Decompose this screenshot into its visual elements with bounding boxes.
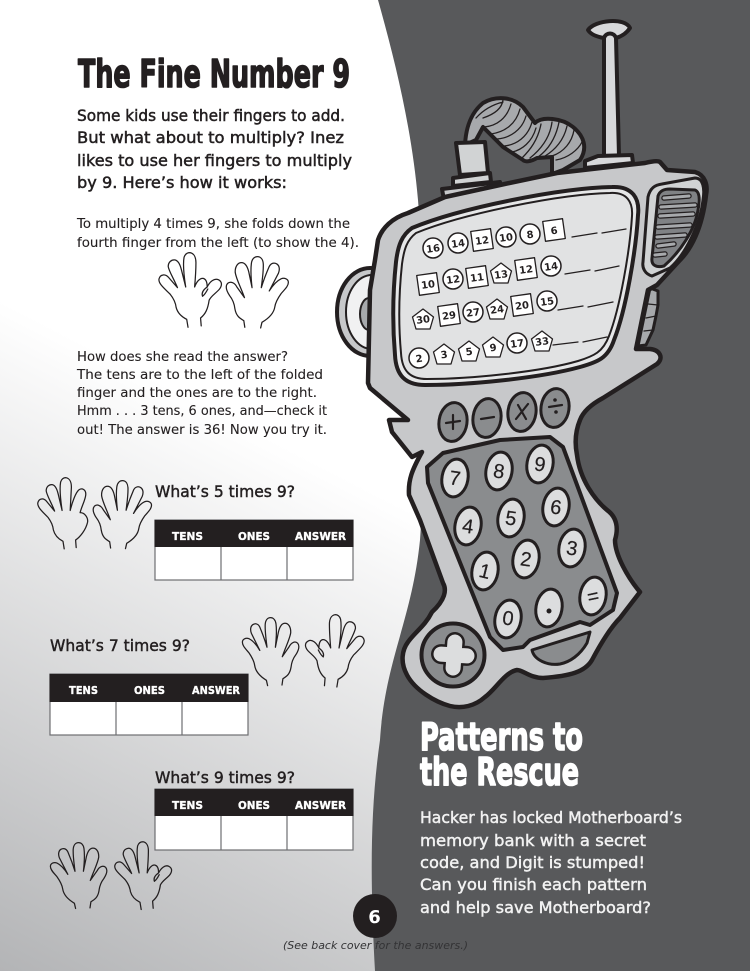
screen	[393, 187, 638, 385]
keypad: 0	[501, 607, 515, 631]
pattern row 4: 33	[535, 336, 550, 349]
answer table 2: ONES	[134, 684, 165, 697]
explanation text: The tens are to the left of the folded	[76, 368, 323, 383]
coiled cable	[465, 98, 584, 174]
page number badge: 6	[368, 907, 381, 928]
side buttons	[638, 288, 658, 346]
instruction text: To multiply 4 times 9, she folds down the	[76, 217, 350, 232]
pattern row 3: 15	[540, 296, 555, 309]
pattern row 3: 27	[466, 307, 481, 320]
keypad	[427, 437, 617, 650]
heading: Patterns to the Rescue: Patterns to	[420, 715, 583, 759]
answer table 3	[154, 789, 354, 850]
round directional pad	[422, 624, 484, 686]
answer table 3: ONES	[238, 799, 270, 812]
keypad: 7	[448, 467, 462, 491]
pattern row 2	[417, 256, 619, 295]
pattern row 1: 16	[426, 243, 441, 256]
pattern row 4: 5	[465, 347, 473, 358]
answer table 1: ONES	[238, 530, 270, 543]
plug	[442, 142, 500, 200]
keypad: 8	[492, 460, 506, 484]
keypad: 9	[533, 453, 547, 477]
pattern row 1: 14	[451, 238, 466, 251]
keypad: =	[585, 585, 601, 609]
keypad: 5	[504, 507, 518, 531]
question: 5 times 9: What’s 5 times 9?	[155, 482, 295, 501]
pattern row 2: 11	[470, 272, 485, 285]
answer table 2: TENS	[69, 684, 98, 697]
antenna	[585, 21, 633, 168]
explanation text: out! The answer is 36! Now you try it.	[77, 423, 327, 438]
pattern row 3: 24	[490, 304, 505, 317]
operation buttons	[436, 387, 572, 443]
page number badge	[353, 894, 397, 938]
answer table 3: ANSWER	[295, 799, 346, 812]
device body	[368, 161, 707, 707]
explanation text	[76, 350, 327, 438]
question: 7 times 9: What’s 7 times 9?	[50, 636, 190, 655]
pattern row 2: 12	[519, 264, 534, 277]
answer table 1	[154, 520, 354, 580]
intro paragraph: But what about to multiply? Inez	[77, 128, 344, 147]
pattern row 1: 12	[475, 235, 490, 248]
speaker vent	[643, 178, 704, 276]
pattern row 1: 8	[526, 230, 534, 241]
pattern row 3: 29	[442, 310, 457, 323]
heading: Patterns to the Rescue	[420, 715, 583, 794]
dark background panel	[372, 0, 750, 971]
icon: hands for 7 times 9	[242, 615, 364, 687]
question: 9 times 9: What’s 9 times 9?	[155, 768, 295, 787]
patterns paragraph: Hacker has locked Motherboard’s	[420, 808, 682, 827]
pattern row 3: 20	[515, 300, 530, 313]
instruction text: fourth finger from the left (to show the 4).	[77, 236, 359, 251]
pattern row 4: 9	[489, 343, 497, 354]
pattern row 4: 17	[510, 338, 525, 351]
pattern row 3: 30	[416, 314, 431, 327]
intro paragraph: likes to use her fingers to multiply	[77, 151, 352, 170]
pattern row 2: 13	[494, 269, 509, 282]
pattern row 4	[409, 331, 607, 368]
crescent button	[532, 632, 590, 664]
calculator device	[337, 21, 707, 707]
pattern row 1	[423, 219, 626, 258]
answer table 1: TENS	[172, 530, 203, 543]
icon: example hands showing 4 times 9	[159, 253, 288, 328]
intro paragraph: by 9. Here’s how it works:	[77, 173, 287, 192]
patterns paragraph	[420, 808, 682, 917]
intro paragraph: Some kids use their fingers to add.	[77, 106, 345, 125]
keypad: 3	[565, 537, 579, 561]
answer table 1: ANSWER	[295, 530, 346, 543]
keypad: 2	[519, 548, 533, 572]
patterns paragraph: Can you finish each pattern	[420, 875, 647, 894]
instruction text	[76, 217, 359, 251]
patterns paragraph: and help save Motherboard?	[420, 898, 651, 917]
pattern row 1: 10	[499, 232, 514, 245]
pattern row 1: 6	[550, 226, 558, 237]
explanation text: How does she read the answer?	[77, 350, 288, 365]
icon: hands for 5 times 9	[38, 478, 152, 549]
answer table 2	[50, 674, 248, 735]
pattern row 4: 2	[415, 354, 423, 365]
patterns paragraph: memory bank with a secret	[420, 831, 646, 850]
explanation text: Hmm . . . 3 tens, 6 ones, and—check it	[77, 404, 327, 419]
pattern row 4: 3	[440, 350, 448, 361]
pattern row 2: 10	[421, 279, 436, 292]
pattern row 3	[412, 291, 613, 329]
keypad: 1	[477, 560, 493, 584]
pattern row 2: 12	[446, 274, 461, 287]
answer table 3: TENS	[172, 799, 203, 812]
footer note: (See back cover for the answers.)	[283, 939, 468, 952]
intro paragraph	[77, 106, 352, 192]
keypad: 4	[461, 515, 475, 539]
pattern row 2: 14	[544, 261, 559, 274]
answer table 2: ANSWER	[192, 684, 240, 697]
heading: Patterns to the Rescue: the Rescue	[420, 750, 579, 794]
side knob	[337, 268, 403, 356]
icon: hands for 9 times 9	[50, 842, 172, 910]
explanation text: finger and the ones are to the right.	[77, 386, 317, 401]
keypad: 6	[549, 496, 563, 520]
title: The Fine Number 9	[78, 52, 350, 96]
patterns paragraph: code, and Digit is stumped!	[420, 853, 645, 872]
